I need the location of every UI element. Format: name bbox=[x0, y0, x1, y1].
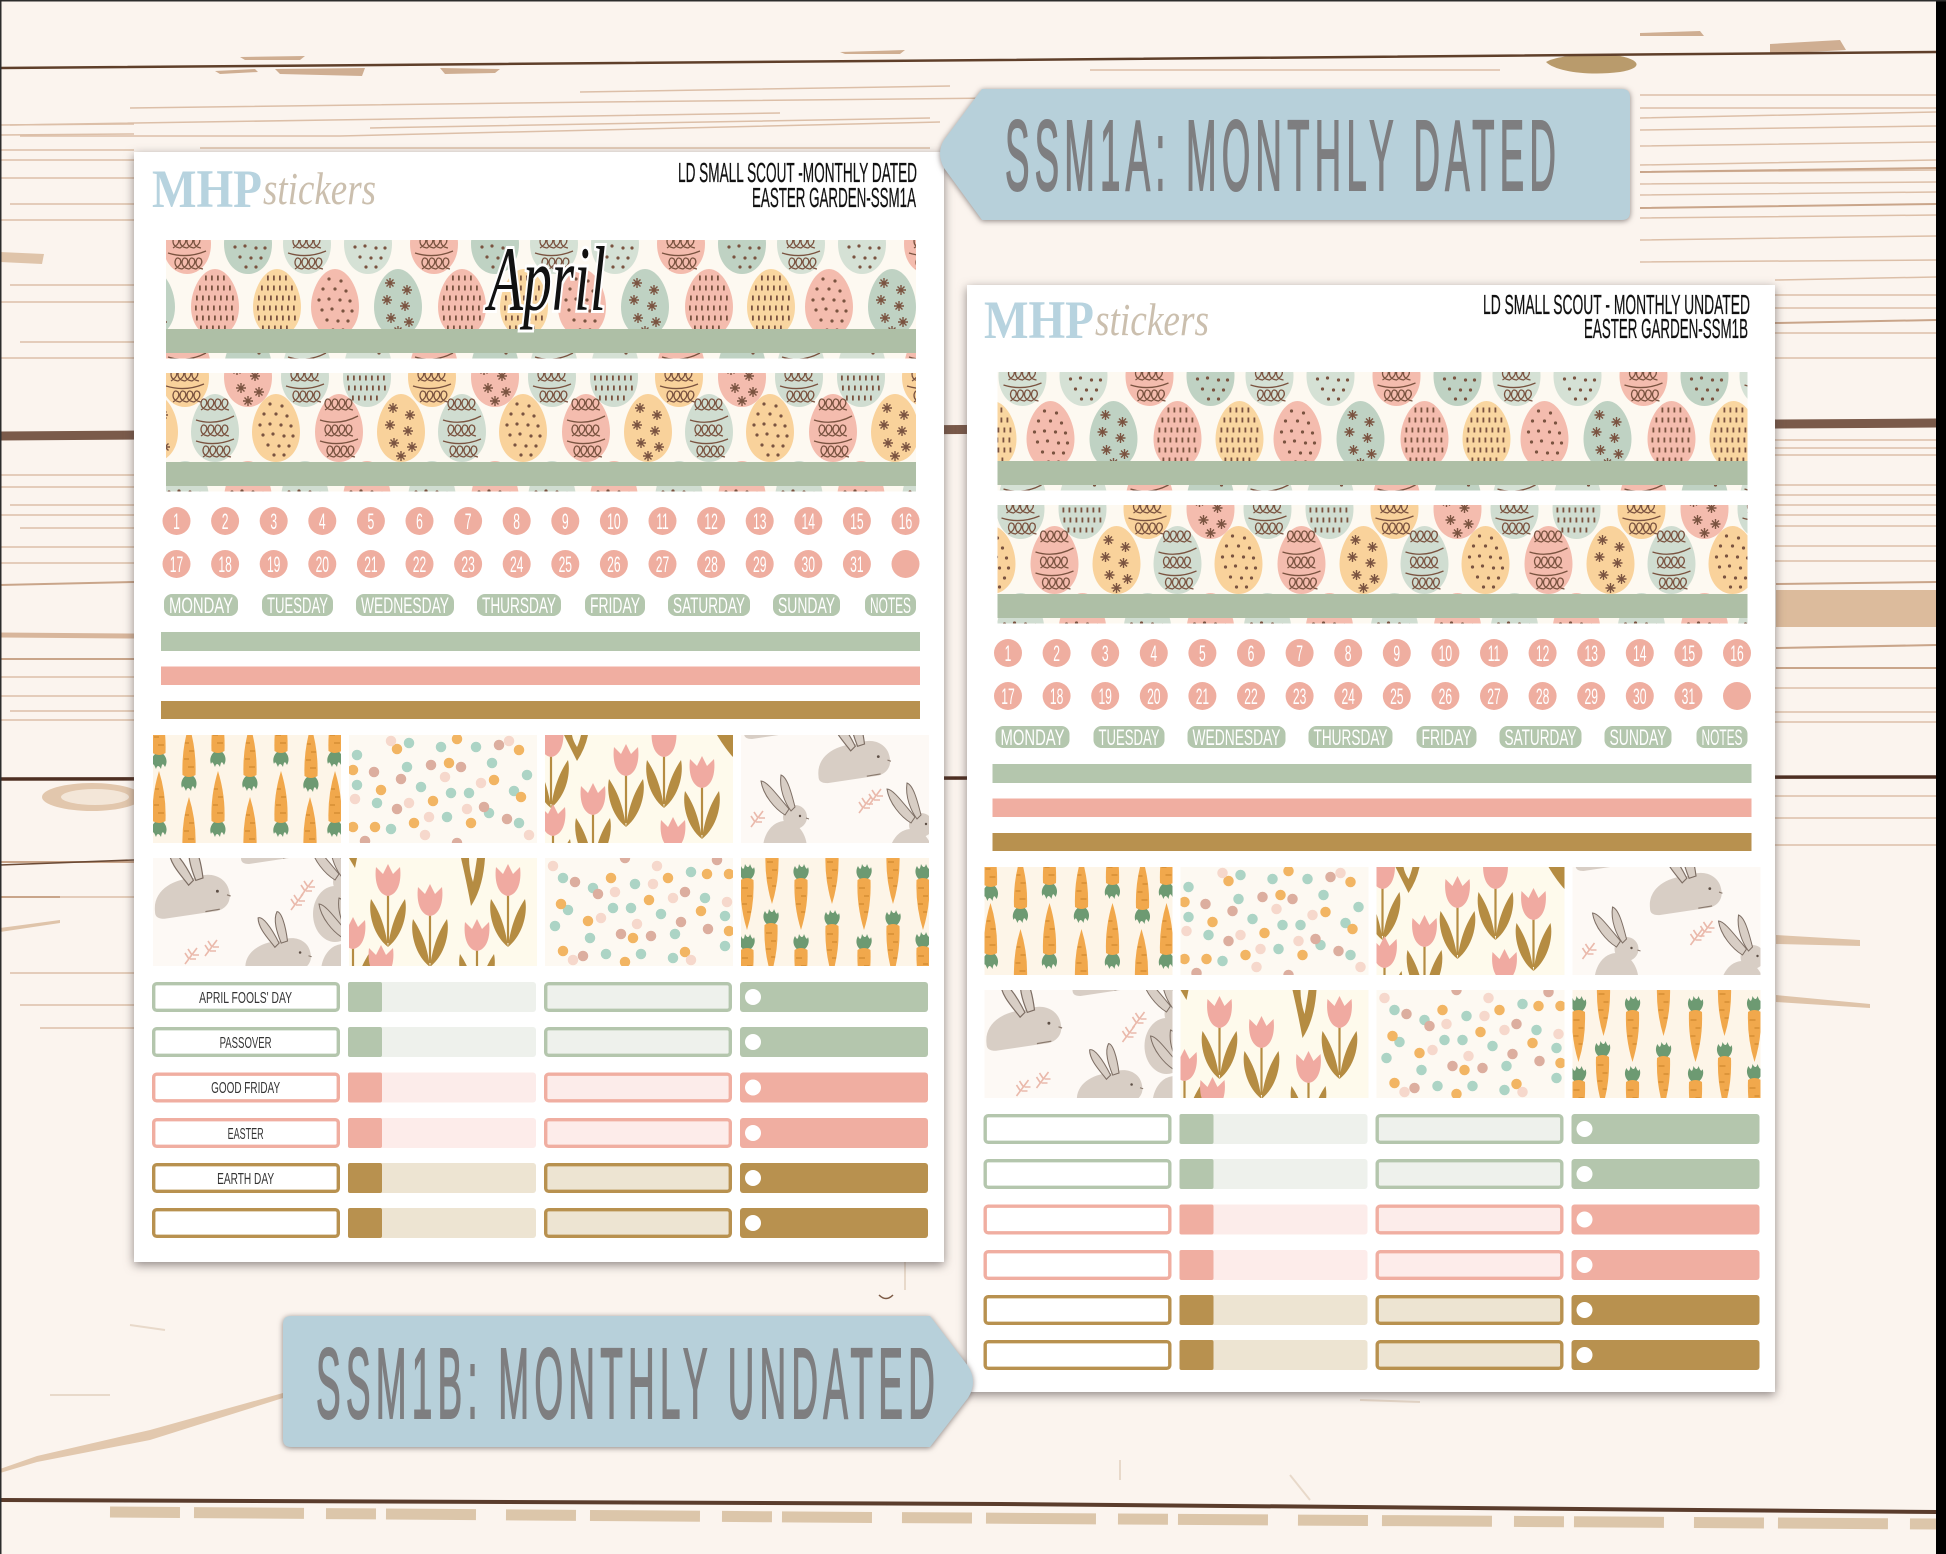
date circles 1 to 31: 23 bbox=[1293, 684, 1306, 709]
date circles 1 to 31: 17 bbox=[1001, 684, 1015, 709]
date circles 1 to 31: 27 bbox=[656, 552, 669, 577]
logo: MHP stickers: stickers bbox=[1095, 294, 1209, 345]
sheet paper bbox=[134, 152, 944, 1262]
header strip 1: egg pattern with April bbox=[166, 240, 916, 358]
date circles 1 to 31: 11 bbox=[1488, 641, 1500, 666]
weekday labels: THURSDAY bbox=[482, 593, 556, 618]
date circles 1 to 31: 17 bbox=[170, 552, 183, 577]
date circles 1 to 31: 18 bbox=[218, 552, 232, 577]
date circles 1 to 31 bbox=[162, 507, 920, 578]
label row: Passover bbox=[154, 1027, 928, 1057]
weekday labels: SATURDAY bbox=[673, 593, 745, 618]
logo: MHP stickers bbox=[984, 290, 1209, 350]
date circles 1 to 31: 26 bbox=[1439, 684, 1452, 709]
date circles 1 to 31: 23 bbox=[461, 552, 475, 577]
logo: MHP stickers: MHP bbox=[152, 159, 262, 219]
logo: MHP stickers bbox=[152, 159, 376, 219]
weekday labels: SUNDAY bbox=[1610, 725, 1667, 750]
date circles 1 to 31: 19 bbox=[1098, 684, 1112, 709]
date circles 1 to 31: 29 bbox=[1584, 684, 1598, 709]
weekday labels bbox=[164, 593, 916, 618]
date circles 1 to 31: 21 bbox=[1196, 684, 1209, 709]
date circles 1 to 31: 19 bbox=[267, 552, 280, 577]
date circles 1 to 31: 30 bbox=[802, 552, 815, 577]
label row: Good Friday bbox=[154, 1072, 928, 1102]
label row: Easter: EASTER bbox=[228, 1126, 264, 1143]
date circles 1 to 31: 6 bbox=[416, 509, 423, 534]
date circles 1 to 31: 9 bbox=[1393, 641, 1400, 666]
date circles 1 to 31: 15 bbox=[1682, 641, 1695, 666]
date circles 1 to 31: 1 bbox=[1005, 641, 1011, 666]
logo: MHP stickers: MHP bbox=[984, 290, 1094, 350]
date circles 1 to 31: 9 bbox=[562, 509, 569, 534]
date circles 1 to 31: 22 bbox=[413, 552, 426, 577]
logo: MHP stickers: stickers bbox=[263, 163, 376, 214]
date circles 1 to 31: 11 bbox=[656, 509, 669, 534]
header strip 2: egg pattern bbox=[998, 505, 1748, 624]
date circles 1 to 31: 15 bbox=[850, 509, 864, 534]
panel: sheet SSM1A monthly dated bbox=[127, 148, 951, 1272]
date circles 1 to 31: 6 bbox=[1248, 641, 1254, 666]
pattern tiles row 1: carrots, dots, tulips, bunnies bbox=[984, 867, 1760, 975]
date circles 1 to 31: 10 bbox=[1439, 641, 1452, 666]
date circles 1 to 31: 3 bbox=[270, 509, 277, 534]
weekday labels: SUNDAY bbox=[778, 593, 835, 618]
date circles 1 to 31: 3 bbox=[1102, 641, 1109, 666]
label row: blank bbox=[154, 1208, 928, 1238]
weekday labels: TUESDAY bbox=[1098, 725, 1160, 750]
header strip 1: egg pattern bbox=[998, 372, 1748, 490]
weekday labels: WEDNESDAY bbox=[361, 593, 449, 618]
colour bars bbox=[161, 632, 920, 719]
date circles 1 to 31: 28 bbox=[1536, 684, 1549, 709]
date circles 1 to 31: 24 bbox=[1341, 684, 1355, 709]
date circles 1 to 31: 2 bbox=[1053, 641, 1060, 666]
weekday labels bbox=[996, 725, 1748, 750]
date circles 1 to 31: 8 bbox=[1345, 641, 1352, 666]
date circles 1 to 31: 28 bbox=[704, 552, 718, 577]
date circles 1 to 31: 5 bbox=[368, 509, 374, 534]
date circles 1 to 31: 31 bbox=[1682, 684, 1695, 709]
date circles 1 to 31: 7 bbox=[465, 509, 471, 534]
date circles 1 to 31: 22 bbox=[1244, 684, 1258, 709]
date circles 1 to 31: 31 bbox=[850, 552, 864, 577]
label row: Earth Day bbox=[154, 1163, 928, 1193]
panel: sheet SSM1A monthly dated: EASTER GARDEN-SSM1A bbox=[752, 182, 916, 213]
label row: Earth Day: EARTH DAY bbox=[217, 1171, 274, 1188]
weekday labels: MONDAY bbox=[169, 593, 233, 618]
date circles 1 to 31: 1 bbox=[173, 509, 180, 534]
date circles 1 to 31: 7 bbox=[1296, 641, 1303, 666]
sheet paper bbox=[967, 285, 1775, 1392]
colour bars bbox=[992, 764, 1752, 851]
panel: sheet SSM1B monthly undated: EASTER GARDEN-SSM1B bbox=[1584, 313, 1748, 344]
weekday labels: SATURDAY bbox=[1504, 725, 1577, 750]
callout tag: SSM1B monthly undated bbox=[283, 1316, 973, 1447]
date circles 1 to 31: 24 bbox=[510, 552, 523, 577]
date circles 1 to 31: 13 bbox=[1584, 641, 1598, 666]
pattern tiles row 2: bunnies, tulips, dots, carrots bbox=[153, 858, 929, 966]
date circles 1 to 31: 13 bbox=[753, 509, 767, 534]
label row: April Fools' Day: APRIL FOOLS' DAY bbox=[199, 990, 292, 1007]
panel: sheet SSM1A monthly dated: LD SMALL SCOUT -MONTHLY DATED bbox=[678, 157, 917, 188]
weekday labels: TUESDAY bbox=[267, 593, 328, 618]
weekday labels: MONDAY bbox=[1000, 725, 1065, 750]
date circles 1 to 31: 26 bbox=[607, 552, 621, 577]
weekday labels: FRIDAY bbox=[590, 593, 640, 618]
date circles 1 to 31: 25 bbox=[559, 552, 572, 577]
callout tag: SSM1A monthly dated bbox=[940, 89, 1630, 220]
date circles 1 to 31: 16 bbox=[1730, 641, 1744, 666]
date circles 1 to 31: 20 bbox=[1147, 684, 1161, 709]
weekday labels: NOTES bbox=[870, 593, 911, 618]
date circles 1 to 31: 18 bbox=[1050, 684, 1063, 709]
sheet heading bbox=[678, 157, 917, 213]
date circles 1 to 31: 5 bbox=[1199, 641, 1206, 666]
date circles 1 to 31: 4 bbox=[1150, 641, 1157, 666]
weekday labels: WEDNESDAY bbox=[1192, 725, 1281, 750]
weekday labels: THURSDAY bbox=[1314, 725, 1388, 750]
date circles 1 to 31: 20 bbox=[316, 552, 329, 577]
date circles 1 to 31 bbox=[994, 639, 1751, 710]
date circles 1 to 31: 21 bbox=[364, 552, 378, 577]
date circles 1 to 31: 25 bbox=[1390, 684, 1404, 709]
date circles 1 to 31: 14 bbox=[802, 509, 815, 534]
date circles 1 to 31: 29 bbox=[753, 552, 767, 577]
date circles 1 to 31: 8 bbox=[513, 509, 520, 534]
date circles 1 to 31: 16 bbox=[899, 509, 912, 534]
pattern tiles row 2: bunnies, tulips, dots, carrots bbox=[984, 990, 1760, 1098]
date circles 1 to 31: 4 bbox=[319, 509, 326, 534]
date circles 1 to 31: 10 bbox=[607, 509, 621, 534]
weekday labels: FRIDAY bbox=[1422, 725, 1472, 750]
sheet heading bbox=[1483, 289, 1750, 344]
header strip 1: egg pattern with April: April bbox=[484, 228, 606, 330]
label row: Easter bbox=[154, 1118, 928, 1148]
header strip 2: egg pattern bbox=[166, 373, 916, 492]
panel: sheet SSM1B monthly undated bbox=[960, 281, 1782, 1402]
date circles 1 to 31: 2 bbox=[222, 509, 228, 534]
date circles 1 to 31: 12 bbox=[704, 509, 718, 534]
pattern tiles row 1: carrots, dots, tulips, bunnies bbox=[153, 735, 929, 843]
label row: Good Friday: GOOD FRIDAY bbox=[211, 1080, 280, 1097]
date circles 1 to 31: 14 bbox=[1633, 641, 1647, 666]
label row: Passover: PASSOVER bbox=[220, 1035, 272, 1052]
blank label rows: green, pink, tan bbox=[985, 1114, 1760, 1370]
date circles 1 to 31: 27 bbox=[1487, 684, 1501, 709]
weekday labels: NOTES bbox=[1702, 725, 1742, 750]
label row: April Fools' Day bbox=[154, 982, 928, 1012]
date circles 1 to 31: 12 bbox=[1536, 641, 1549, 666]
date circles 1 to 31: 30 bbox=[1633, 684, 1647, 709]
